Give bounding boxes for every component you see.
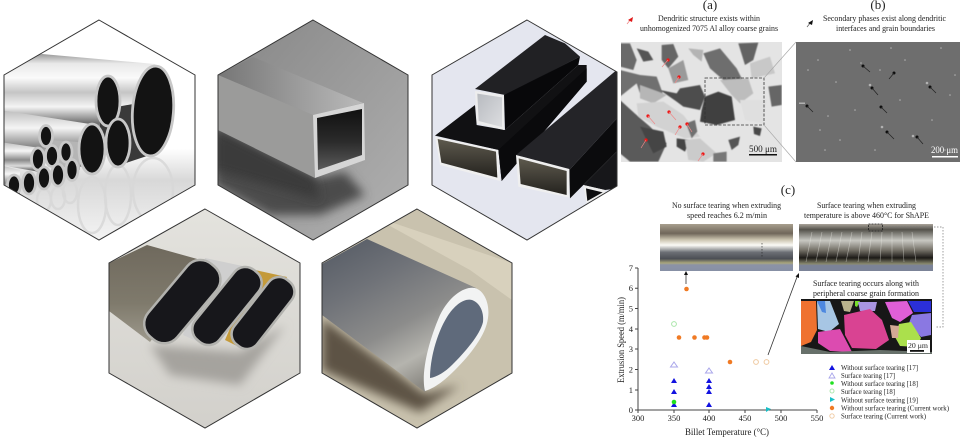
series: without tearing [18] [672,400,676,404]
y axis tick labels: 0 [629,405,633,415]
series: surface tearing current work [754,360,769,364]
caption: peripheral coarse grain: peripheral coarse grain formation [813,289,919,298]
x axis title: Billet Temperature (°C) [685,427,769,437]
caption: no surface tearing [672,201,781,220]
series: surface tearing [17] [670,362,712,373]
y axis tick labels: 4 [629,324,634,334]
hexagon photo: black rectangular tubes [430,15,620,245]
legend: Without surface tearing [18] [841,379,918,388]
series: surface tearing [18] [672,322,676,326]
legend [829,363,949,420]
caption: no surface tearing: No surface tearing when extruding [672,201,781,210]
x axis tick labels: 400 [703,413,715,423]
series: without tearing [17] [671,378,712,407]
caption: surface tearing above 460C: Surface tearing when extruding [817,201,916,210]
y axis title: Extrusion Speed (m/min) [616,297,626,383]
arrow: to smooth strip [684,271,688,284]
zoom connector lines between (a) and (b) [764,42,796,162]
legend: Without surface tearing [17] [841,363,918,372]
x axis tick labels: 300 [632,413,644,423]
caption: dendritic structure: Dendritic structure exists within [658,14,760,23]
y axis tick labels: 6 [629,283,633,293]
caption: surface tearing above 460C: temperature is above 460°C for ShAPE [804,211,929,220]
y axis tick labels: 1 [629,385,633,395]
photo strip: smooth extrudate surface [660,224,793,271]
micrograph (a): coarse grains [620,42,782,162]
y axis tick labels: 2 [629,364,633,374]
series: without tearing current work [677,287,732,364]
legend: Surface tearing (Current work) [841,412,926,420]
y axis tick labels: 3 [629,344,633,354]
micrograph (a): coarse grains: 500 μm [749,145,778,155]
caption: dendritic structure: unhomogenized 7075 Al alloy coarse grains [640,24,778,33]
arrow: to torn strip [768,273,799,355]
x axis tick labels: 450 [739,413,751,423]
hexagon photo: oval flat tubes [105,205,305,430]
y axis tick labels: 5 [629,304,633,314]
legend: Without surface tearing (Current work) [841,404,949,412]
x axis tick labels: 500 [775,413,787,423]
photo strip: torn extrudate surface [799,224,933,271]
micrograph (b): secondary phases [796,42,960,162]
scatter chart: extrusion speed vs billet temperature [616,263,823,437]
caption: dendritic structure [640,14,778,33]
legend: Surface tearing [18] [841,387,895,396]
icon: black arrow key [807,20,813,27]
legend: Without surface tearing [19] [841,396,918,404]
axes [635,268,817,413]
legend: Surface tearing [17] [841,371,895,380]
hexagon photo: stack of round steel tubes [0,15,200,245]
panel label (c): (c) [781,182,795,197]
series: without tearing [19] [766,407,771,412]
x axis tick labels: 350 [668,413,680,423]
EBSD grain map: 20 μm [908,341,928,350]
icon: red arrow key [627,17,633,24]
caption: peripheral coarse grain [813,279,919,298]
caption: secondary phases [823,14,946,33]
hexagon photo: D-shaped aluminium tube [320,205,515,430]
caption: peripheral coarse grain: Surface tearing occurs along with [813,279,919,288]
caption: surface tearing above 460C [804,201,929,220]
EBSD grain map [801,299,932,354]
dotted callout connecting torn strip to grain map [883,227,943,327]
hexagon photo: square aluminium tube [215,15,410,245]
x axis tick labels: 550 [811,413,823,423]
caption: secondary phases: Secondary phases exist along dendritic [823,14,946,23]
x axis tick labels [632,413,823,423]
micrograph (b): secondary phases: 200 μm [931,146,959,156]
y axis tick labels: 7 [629,263,633,273]
caption: secondary phases: interfaces and grain boundaries [836,24,935,33]
y axis tick labels [629,263,634,415]
caption: no surface tearing: speed reaches 6.2 m/min [687,211,767,220]
